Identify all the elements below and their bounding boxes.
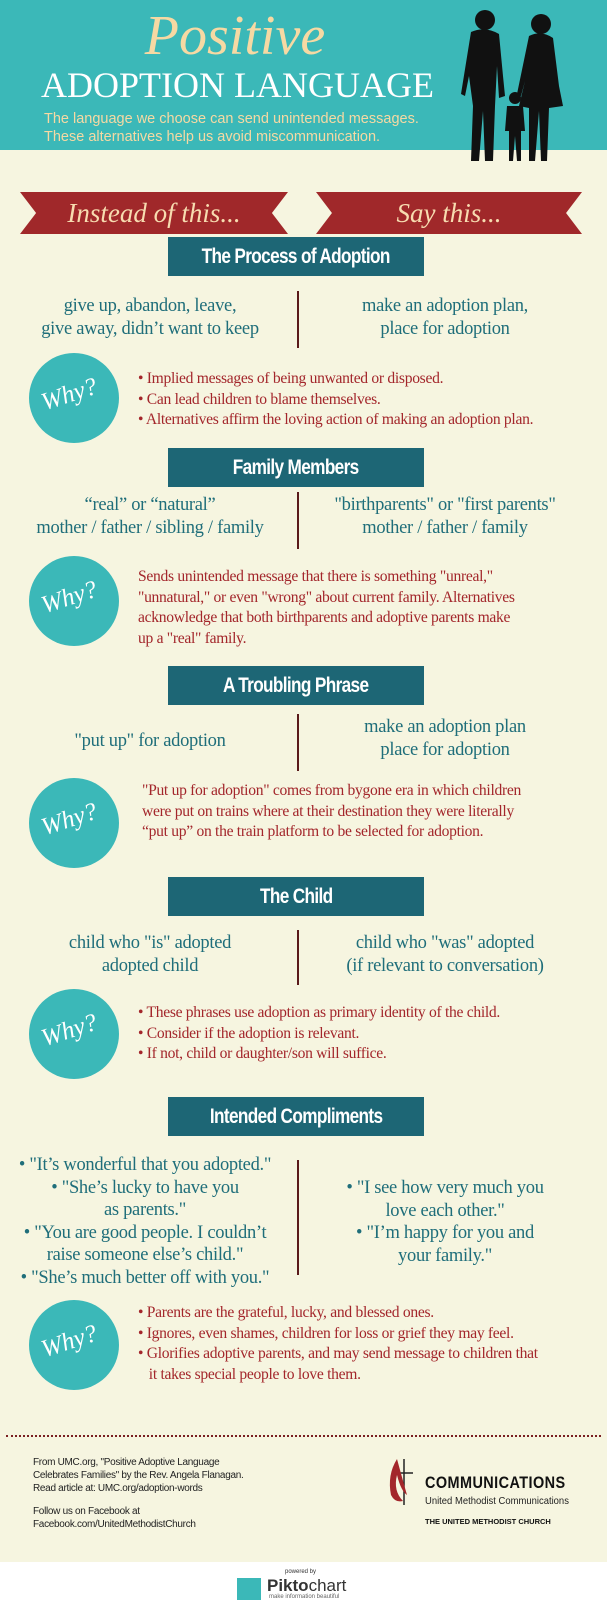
text: child say: child who "was" adopted <box>356 933 534 953</box>
why text 2: up a "real" family. <box>138 630 246 646</box>
title main: ADOPTION LANGUAGE <box>41 65 434 105</box>
text: compliments say <box>346 1178 544 1266</box>
why text 2 <box>138 568 515 646</box>
why circle 5: Why? <box>38 1320 101 1363</box>
logo: UMC communications <box>390 1459 569 1526</box>
logo: UMC communications: THE UNITED METHODIST CHURCH <box>425 1517 551 1526</box>
text: child instead <box>69 933 232 976</box>
why text 3: "Put up for adoption" comes from bygone era in which children <box>142 782 521 799</box>
text: process say: make an adoption plan, <box>362 296 528 316</box>
text: process instead <box>41 296 259 339</box>
why text 4: • Consider if the adoption is relevant. <box>138 1024 359 1042</box>
why circle 4 <box>29 989 119 1079</box>
subtitle: The language we choose can send unintended messages. <box>44 111 419 127</box>
ribbon: instead of this <box>20 192 288 234</box>
icon: family silhouette <box>461 10 563 161</box>
why text 4 <box>138 1004 500 1062</box>
why text 2: Sends unintended message that there is something "unreal," <box>138 568 493 585</box>
why text 5: • Ignores, even shames, children for loss or grief they may feel. <box>138 1324 514 1342</box>
title script: Positive <box>145 5 325 67</box>
why text 4: • If not, child or daughter/son will suffice. <box>138 1045 386 1062</box>
heading: process <box>168 237 424 276</box>
why text 1 <box>138 370 533 428</box>
why circle 3: Why? <box>38 798 101 841</box>
subtitle <box>44 111 419 145</box>
why circle 4: Why? <box>38 1009 101 1052</box>
ribbon: say this: Say this... <box>396 198 502 228</box>
subtitle: These alternatives help us avoid miscommunication. <box>44 129 380 145</box>
piktochart badge <box>237 1568 346 1600</box>
footer source text: Read article at: UMC.org/adoption-words <box>33 1483 202 1494</box>
heading: process: The Process of Adoption <box>202 245 390 268</box>
footer source text: Celebrates Families" by the Rev. Angela Flanagan. <box>33 1470 243 1481</box>
text: powered by <box>285 1569 316 1575</box>
heading: child: The Child <box>260 885 332 908</box>
why text 4: • These phrases use adoption as primary identity of the child. <box>138 1004 500 1021</box>
text: compliments say: • "I see how very much you <box>346 1178 544 1198</box>
footer source text: From UMC.org, "Positive Adoptive Language <box>33 1457 219 1468</box>
why text 1: • Implied messages of being unwanted or disposed. <box>138 370 443 387</box>
text: family say <box>334 495 556 538</box>
text: family say: "birthparents" or "first parents" <box>334 495 556 515</box>
heading: family: Family Members <box>233 456 359 479</box>
text: compliments instead: • "She’s much better off with you." <box>21 1268 269 1288</box>
text: compliments say: • "I’m happy for you and <box>356 1223 534 1243</box>
why circle 1: Why? <box>38 373 101 416</box>
text: compliments say: love each other." <box>385 1200 505 1220</box>
ribbon: instead of this: Instead of this... <box>67 198 241 228</box>
logo: UMC communications: COMMUNICATIONS <box>425 1473 566 1492</box>
text: family instead <box>36 495 264 538</box>
why text 3: were put on trains where at their destination they were literally <box>142 802 514 820</box>
text: process instead: give away, didn’t want to keep <box>41 319 259 339</box>
text: compliments instead: as parents." <box>104 1200 186 1220</box>
piktochart badge: Piktochart <box>267 1576 346 1595</box>
text: troubling instead: "put up" for adoption <box>74 731 226 751</box>
heading: compliments <box>168 1097 424 1136</box>
why circle 3 <box>29 778 119 868</box>
text: compliments instead: raise someone else’s child." <box>47 1245 243 1265</box>
logo: UMC communications: United Methodist Communications <box>425 1495 569 1507</box>
piktochart badge: make information beautiful <box>269 1594 339 1600</box>
why text 3: “put up” on the train platform to be selected for adoption. <box>142 823 483 840</box>
text: family instead: “real” or “natural” <box>85 495 215 515</box>
text: troubling say <box>364 717 526 760</box>
text: process instead: give up, abandon, leave, <box>64 296 236 316</box>
text: compliments instead <box>19 1155 271 1288</box>
heading: child <box>168 877 424 916</box>
why text 1: • Alternatives affirm the loving action of making an adoption plan. <box>138 411 533 428</box>
text: child say <box>346 933 544 976</box>
heading: family <box>168 448 424 487</box>
header panel <box>0 0 607 150</box>
why circle 2: Why? <box>38 576 101 619</box>
heading: troubling: A Troubling Phrase <box>223 674 369 697</box>
text: child say: (if relevant to conversation) <box>346 956 544 976</box>
text: child instead: child who "is" adopted <box>69 933 231 953</box>
text: child instead: adopted child <box>102 956 198 976</box>
text: compliments instead: • "She’s lucky to have you <box>51 1178 239 1198</box>
why text 2: acknowledge that both birthparents and adoptive parents make <box>138 609 510 626</box>
why circle 1 <box>29 353 119 443</box>
why circle 2 <box>29 556 119 646</box>
why text 5: it takes special people to love them. <box>149 1366 361 1382</box>
text: process say: place for adoption <box>380 319 510 339</box>
why text 5: • Parents are the grateful, lucky, and blessed ones. <box>138 1304 434 1321</box>
dotted divider <box>6 1435 601 1437</box>
text: compliments instead: • "It’s wonderful that you adopted." <box>19 1155 271 1175</box>
text: family say: mother / father / family <box>362 518 528 538</box>
footer source text: Follow us on Facebook at <box>33 1506 140 1517</box>
why text 1: • Can lead children to blame themselves. <box>138 390 380 408</box>
text: process say <box>362 296 528 339</box>
ribbon: say this <box>316 192 582 234</box>
why text 5: • Glorifies adoptive parents, and may send message to children that <box>138 1345 538 1362</box>
text: troubling say: make an adoption plan <box>364 717 526 737</box>
text: compliments instead: • "You are good people. I couldn’t <box>24 1222 266 1242</box>
icon: cross and flame <box>390 1459 413 1505</box>
why circle 5 <box>29 1300 119 1390</box>
footer source text <box>33 1457 243 1530</box>
text: troubling say: place for adoption <box>380 740 510 760</box>
why text 2: "unnatural," or even "wrong" about current family. Alternatives <box>138 588 515 606</box>
why text 3 <box>142 782 522 840</box>
text: family instead: mother / father / sibling / family <box>36 518 264 538</box>
why text 5 <box>138 1304 538 1382</box>
footer source text: Facebook.com/UnitedMethodistChurch <box>33 1519 196 1530</box>
heading: compliments: Intended Compliments <box>210 1105 382 1128</box>
text: compliments say: your family." <box>398 1246 492 1266</box>
heading: troubling <box>168 666 424 705</box>
